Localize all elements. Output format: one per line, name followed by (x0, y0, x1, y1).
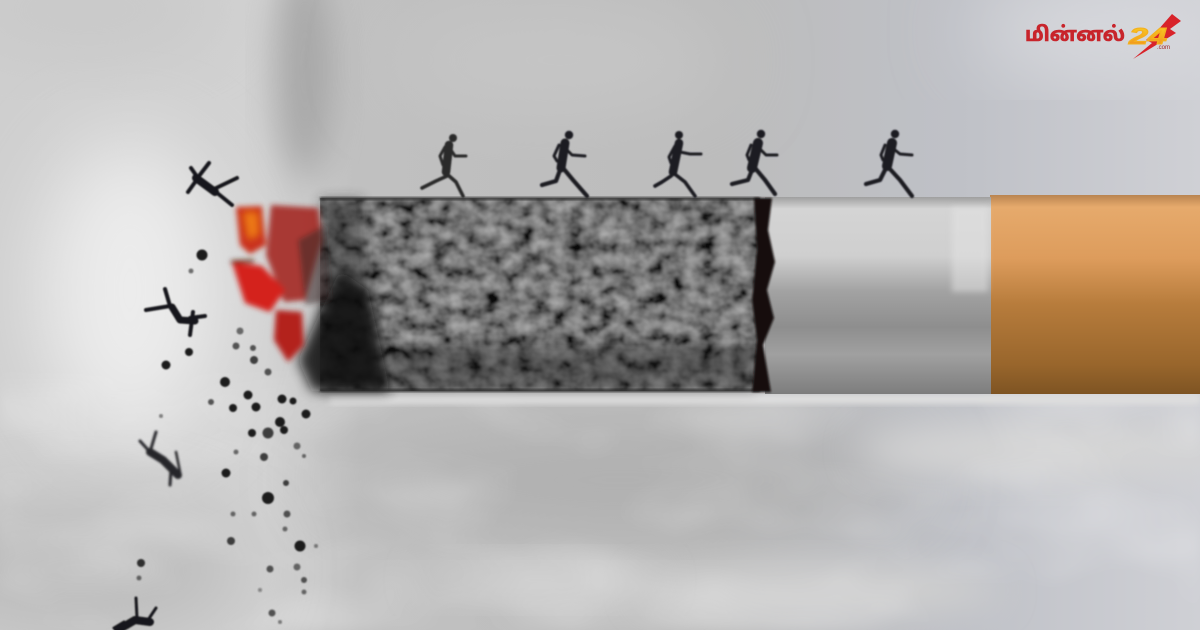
figure: falling person 2 (146, 289, 205, 335)
runner 5 (866, 130, 912, 196)
charred edge between ash and paper (752, 198, 775, 392)
cigarette (298, 195, 1200, 394)
logo lightning bolt (1133, 14, 1181, 59)
runner 1 (422, 134, 466, 196)
figure: falling person 3 (140, 432, 180, 485)
logo number 24: 24 (1128, 23, 1167, 49)
logo: மின்னல் 24 (1025, 14, 1181, 59)
runner 4 (732, 130, 777, 194)
logo .com: .com (1157, 45, 1170, 51)
burning ash body (298, 197, 760, 392)
figure: falling person 1 (188, 163, 237, 205)
cigarette paper (765, 197, 991, 394)
cigarette filter: orange tip (990, 195, 1200, 394)
runners on top of the cigarette (422, 130, 912, 196)
ember: glowing red tip (231, 205, 330, 362)
runner 2 (542, 131, 587, 196)
runner 3 (655, 131, 701, 196)
figure: falling person 4 (114, 598, 156, 630)
logo wordmark: மின்னல் (1025, 24, 1125, 46)
falling ash debris (136, 250, 318, 624)
